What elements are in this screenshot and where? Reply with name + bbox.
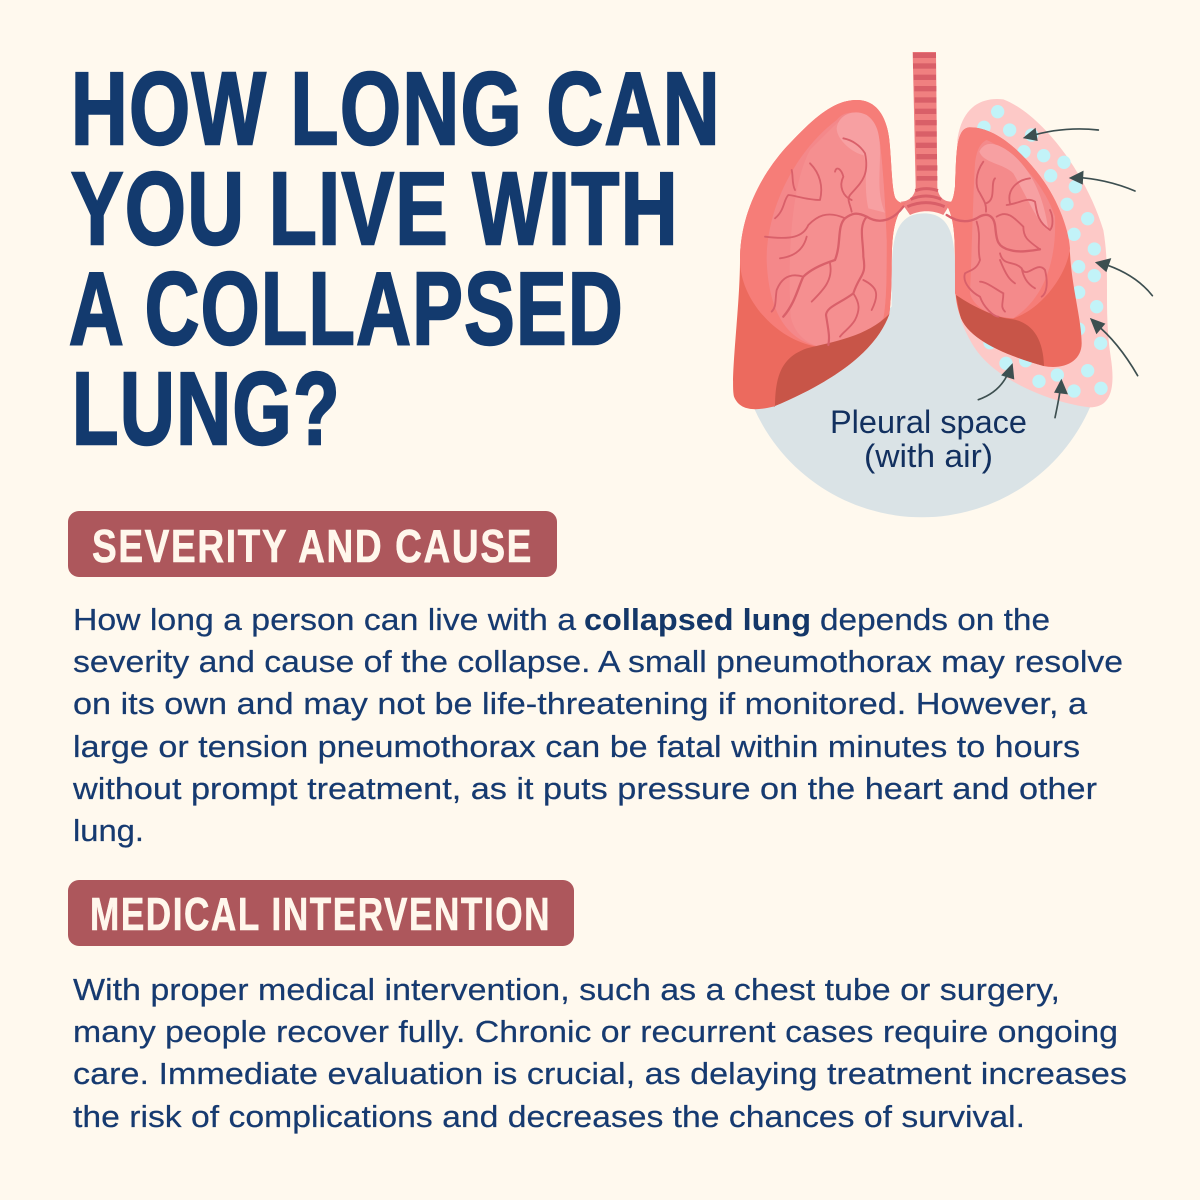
- title: LUNG?: [72, 351, 341, 466]
- diagram label: Pleural space: [830, 404, 1027, 440]
- text block: medical intervention: care. Immediate evaluation is crucial, as delaying treatment increases: [73, 1056, 1127, 1091]
- left lung vessels: [765, 138, 903, 345]
- chest silhouette: [753, 213, 1090, 517]
- illustration: collapsed lung diagram: [733, 52, 1152, 517]
- text block: severity and cause: How long a person can live with a: [73, 602, 577, 637]
- section heading: medical intervention: MEDICAL INTERVENTION: [90, 888, 551, 940]
- title: A COLLAPSED: [69, 251, 624, 366]
- text block: severity and cause: collapsed lung: [584, 602, 811, 637]
- diagram label: (with air): [864, 438, 993, 474]
- right lung: [947, 127, 1082, 367]
- text block: severity and cause: severity and cause of the collapse. A small pneumothorax may resolve: [73, 644, 1123, 679]
- section heading: medical intervention: [68, 880, 574, 946]
- text block: medical intervention: the risk of complications and decreases the chances of survival.: [73, 1099, 1025, 1134]
- text block: severity and cause: depends on the: [820, 602, 1050, 637]
- arrow 1: [1025, 129, 1098, 140]
- text block: medical intervention: many people recover fully. Chronic or recurrent cases require ongoing: [73, 1014, 1118, 1049]
- arrow 6: [1055, 381, 1067, 418]
- text block: severity and cause: [72, 602, 1123, 848]
- title: YOU LIVE WITH: [71, 151, 679, 266]
- text block: severity and cause: on its own and may not be life-threatening if monitored. However, a: [73, 686, 1088, 721]
- trachea: [901, 52, 952, 215]
- diagram label: [830, 404, 1027, 474]
- section heading: severity and cause: [68, 511, 557, 577]
- arrow 2: [1071, 172, 1135, 191]
- arrow 3: [1097, 259, 1152, 296]
- title: [69, 51, 721, 466]
- title: HOW LONG CAN: [71, 51, 721, 166]
- arrow 4: [1091, 319, 1138, 376]
- text block: severity and cause: without prompt treatment, as it puts pressure on the heart and other: [72, 771, 1097, 806]
- arrows pointing to pleural air: [978, 129, 1152, 418]
- section heading: severity and cause: SEVERITY AND CAUSE: [92, 520, 533, 572]
- text block: severity and cause: large or tension pneumothorax can be fatal within minutes to hours: [73, 729, 1080, 764]
- left lung: [733, 100, 905, 409]
- pleural space with air: [955, 99, 1113, 407]
- right lung vessels: [947, 162, 1052, 317]
- text block: medical intervention: With proper medical intervention, such as a chest tube or surgery,: [73, 972, 1060, 1007]
- text block: medical intervention: [73, 972, 1127, 1134]
- text block: severity and cause: lung.: [73, 813, 144, 848]
- arrow 5: [978, 365, 1013, 400]
